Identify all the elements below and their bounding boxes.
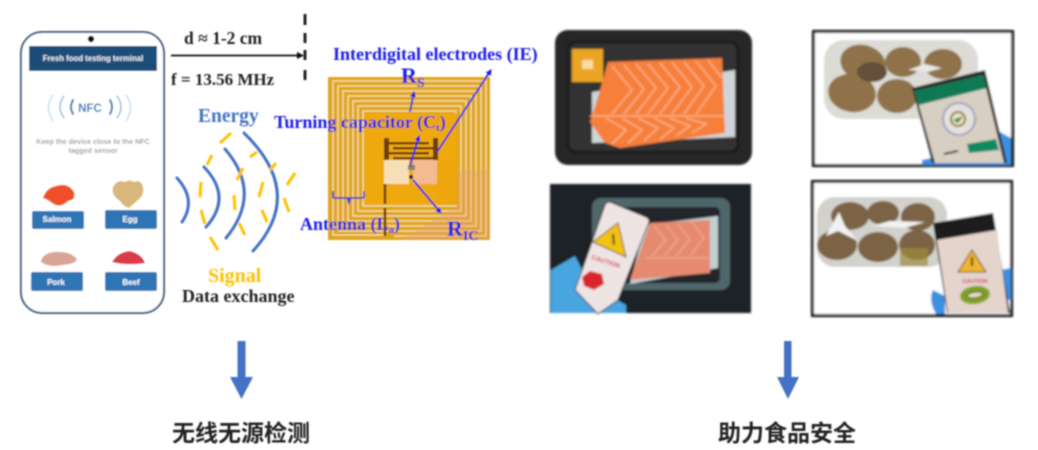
- panel: NFC sensor tag: [274, 44, 538, 244]
- salmon fat lines: [645, 222, 710, 258]
- blue glove: [551, 256, 626, 313]
- frequency label: f = 13.56 MHz: [171, 70, 275, 89]
- kiwis: [825, 40, 962, 116]
- Antenna label: a: [389, 224, 395, 236]
- tray: [592, 198, 730, 290]
- button: beef: [105, 272, 157, 291]
- button: salmon: [32, 211, 84, 229]
- R_S label: S: [417, 76, 425, 91]
- NFC symbol: NFC: [78, 103, 102, 115]
- frame: [812, 182, 1012, 316]
- button: egg: [105, 210, 157, 229]
- phone with caution: [933, 213, 1010, 313]
- lower right coil step: [437, 158, 457, 205]
- backing paper: [630, 216, 718, 284]
- gloved hand: [922, 132, 1011, 165]
- energy label: Energy: [198, 106, 259, 127]
- Turning capacitor label: ): [440, 112, 446, 133]
- energy waves: [177, 133, 277, 251]
- panel: energy and signal link: [171, 14, 305, 306]
- R_S label: R: [401, 63, 417, 88]
- photo: kiwi caution check: [812, 182, 1012, 316]
- backing paper: [592, 70, 735, 143]
- plastic tray: [824, 40, 978, 119]
- kiwis: [817, 201, 935, 262]
- NFC symbol: [48, 95, 130, 121]
- tray inner rim: [568, 42, 738, 152]
- caution label: CAUTION: [590, 254, 621, 270]
- heading: food safety: 助力食品安全: [718, 420, 856, 446]
- photo: salmon caution check: [550, 184, 751, 314]
- signal waves: [200, 133, 295, 250]
- food icon: pork: [41, 252, 77, 266]
- coil lower right tint: [400, 170, 490, 240]
- R_IC label: IC: [463, 229, 478, 244]
- dark background: [550, 184, 751, 313]
- plastic glare: [908, 64, 942, 72]
- IC chip: [408, 165, 415, 179]
- boundary dashed line: [304, 14, 306, 80]
- Turning capacitor label: Turning capacitor (C: [274, 112, 436, 132]
- antenna coil: [333, 81, 486, 236]
- tray inner shadow: [606, 207, 720, 283]
- app header: Fresh food testing terminal: [43, 54, 143, 63]
- food icon: beef: [112, 251, 145, 264]
- button: pork: Pork: [47, 278, 65, 287]
- photo: salmon tray with tag: [555, 30, 752, 165]
- phone with app: [912, 70, 1007, 163]
- button: salmon: Salmon: [43, 215, 72, 224]
- distance label: d ≈ 1-2 cm: [184, 28, 263, 48]
- Antenna label: ): [394, 214, 400, 235]
- button: beef: Beef: [122, 278, 140, 287]
- antenna feed line: [384, 184, 386, 236]
- food icon: egg: [113, 180, 143, 208]
- heading: wireless passive detection: 无线无源检测: [172, 420, 310, 446]
- food icon: salmon: [43, 185, 74, 206]
- caution triangle: [593, 223, 626, 257]
- frame: [814, 32, 1012, 166]
- distance arrow: [171, 52, 304, 59]
- button: egg: Egg: [122, 215, 138, 224]
- gloved hand: [931, 268, 1011, 314]
- kiwi shadow: [857, 62, 887, 82]
- salmon fillet: [630, 220, 710, 280]
- sensor tag: [900, 248, 928, 266]
- phone body: [21, 32, 164, 313]
- inner gold area: [364, 113, 457, 205]
- right sensing patch: [413, 160, 437, 184]
- phone with caution: CAUTION: [962, 279, 988, 285]
- tray: [555, 30, 752, 165]
- callout arrows: [410, 70, 491, 213]
- salmon fat lines: [590, 60, 725, 144]
- Antenna label: Antenna (L: [300, 214, 389, 234]
- phone camera: [88, 36, 94, 42]
- panel: phone terminal: [21, 32, 164, 313]
- instruction text: [36, 137, 150, 155]
- button: pork: [31, 272, 83, 291]
- Turning capacitor label: t: [436, 122, 440, 134]
- salmon fillet: [590, 58, 725, 148]
- R_IC label: R: [447, 216, 463, 241]
- antenna bracket: [333, 191, 364, 204]
- interdigital electrodes: [384, 138, 438, 162]
- arrow: right down: [777, 341, 799, 399]
- photo: kiwi tray scan: [814, 32, 1012, 166]
- instruction text: tagged sensor: [68, 146, 118, 155]
- NFC tag: [572, 49, 603, 82]
- left sensing patch: [384, 160, 409, 184]
- Interdigital electrodes label: Interdigital electrodes (IE): [333, 44, 538, 65]
- spoiled salmon icon: [582, 271, 604, 290]
- arrow: left down: [230, 341, 253, 399]
- phone showing caution: [575, 202, 649, 314]
- gold substrate: [328, 77, 490, 240]
- instruction text: Keep the device close to the NFC: [36, 137, 150, 146]
- signal label: Signal: [208, 265, 262, 287]
- data exchange label: Data exchange: [182, 286, 294, 306]
- plastic glare: [826, 212, 925, 241]
- plastic tray: [817, 197, 947, 267]
- app header: [29, 46, 157, 71]
